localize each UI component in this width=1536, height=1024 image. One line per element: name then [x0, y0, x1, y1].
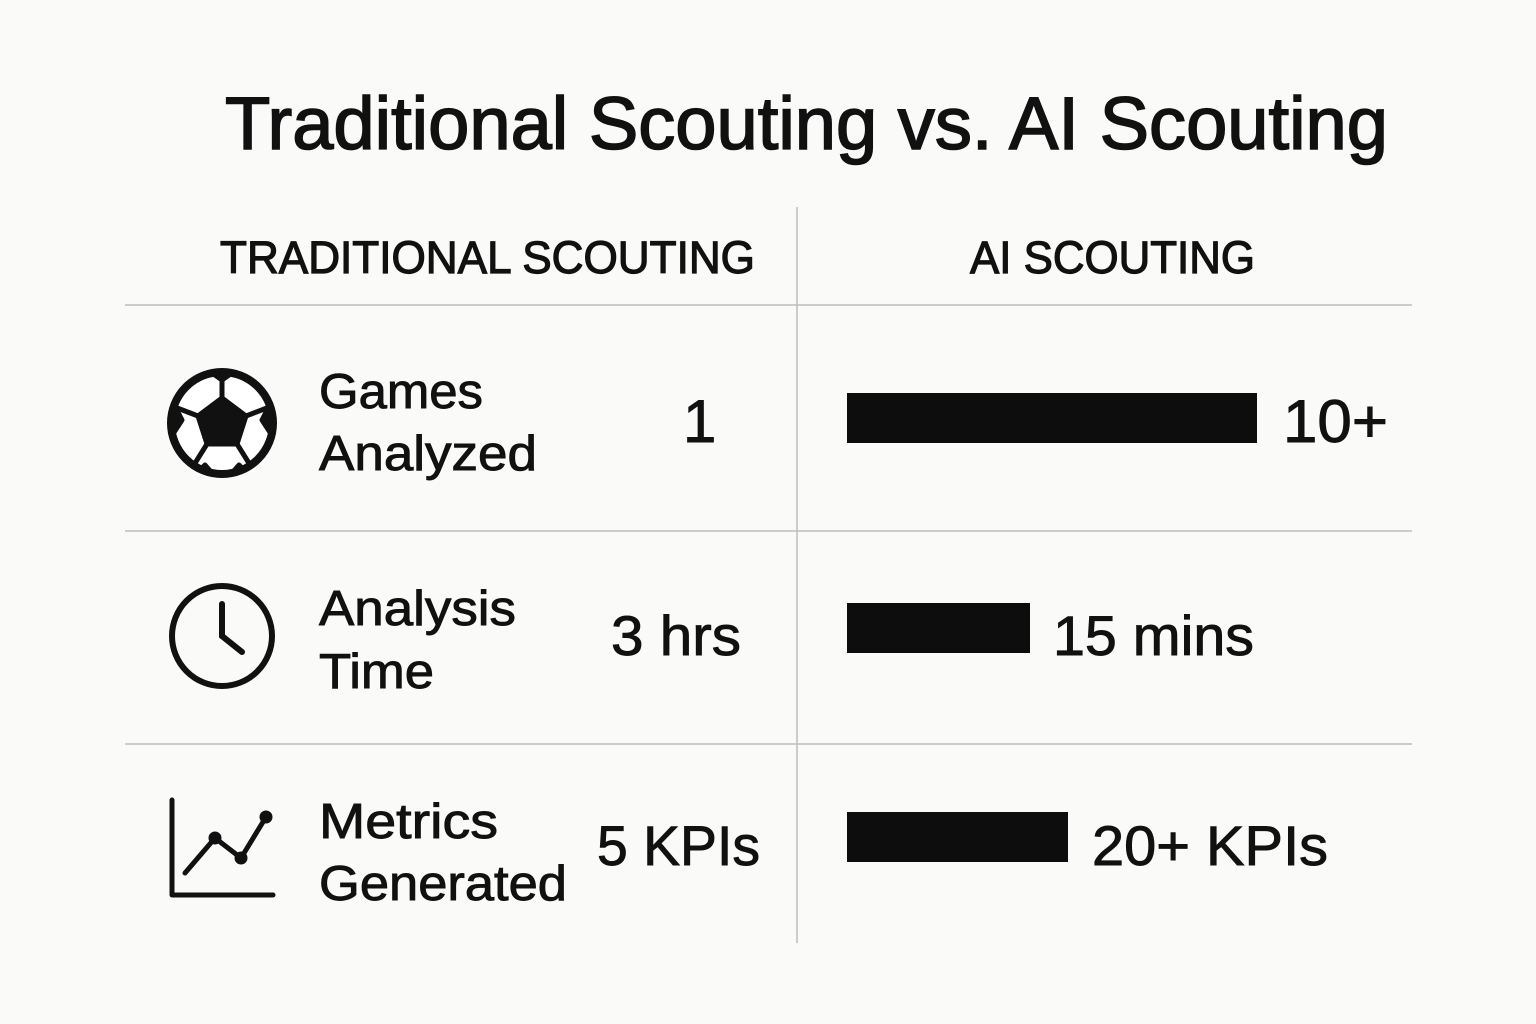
icon: line chart — [172, 800, 273, 895]
label: analysis time: Analysis — [319, 582, 516, 636]
icon: clock — [172, 586, 272, 686]
row: metrics generated — [172, 795, 1328, 911]
row: games analyzed — [169, 365, 1388, 481]
value: AI time: 15 mins — [1053, 604, 1254, 667]
label: metrics generated: Metrics — [319, 795, 498, 849]
row: analysis time — [172, 582, 1254, 699]
column header: AI: AI SCOUTING — [970, 232, 1255, 283]
label: games analyzed: Analyzed — [319, 427, 537, 481]
bar: AI time — [847, 603, 1030, 653]
value: AI games: 10+ — [1283, 388, 1388, 455]
value: traditional games: 1 — [683, 388, 716, 455]
label: games analyzed: Games — [319, 365, 483, 419]
icon: soccer ball — [169, 368, 275, 480]
column header: traditional: TRADITIONAL SCOUTING — [220, 232, 755, 283]
value: traditional time: 3 hrs — [611, 604, 741, 667]
title: Traditional Scouting vs. AI Scouting — [225, 82, 1388, 165]
label: metrics generated: Generated — [319, 857, 567, 911]
value: AI metrics: 20+ KPIs — [1092, 814, 1328, 877]
bar: AI metrics — [847, 812, 1068, 862]
value: traditional metrics: 5 KPIs — [597, 814, 760, 877]
label: analysis time: Time — [319, 645, 434, 699]
bar: AI games — [847, 393, 1257, 443]
